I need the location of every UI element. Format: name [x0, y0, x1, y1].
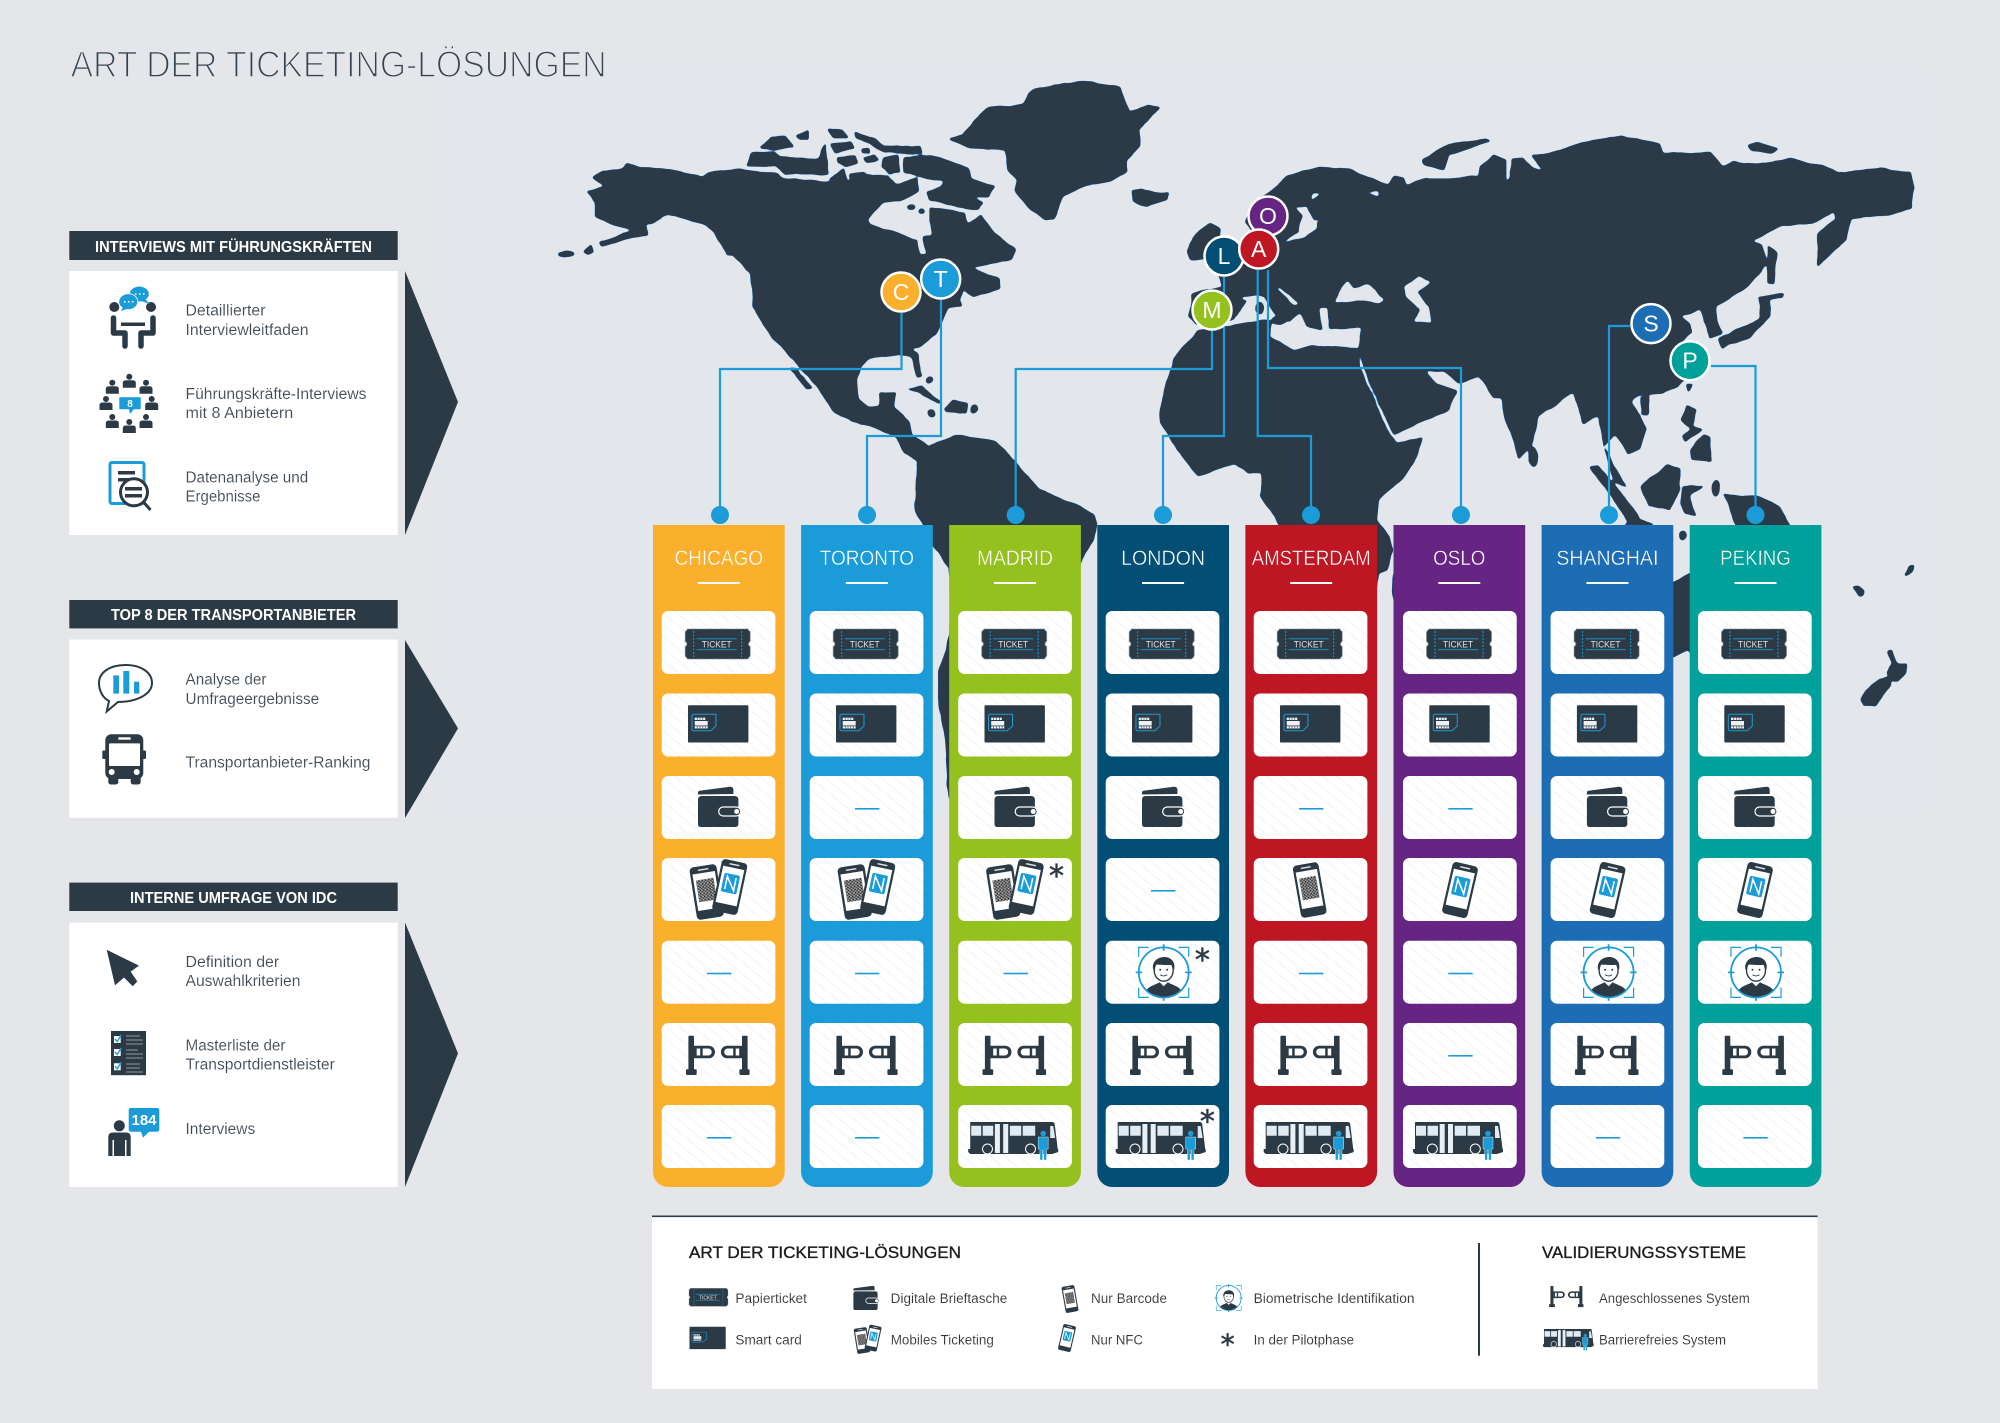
panel: top 8 header: TOP 8 DER TRANSPORTANBIETER [111, 607, 356, 624]
legend text: Smart card: Smart card [735, 1332, 802, 1348]
heading: Amsterdam: AMSTERDAM [1252, 546, 1371, 570]
card: wallet [1698, 776, 1812, 839]
legend text: In der Pilotphase: In der Pilotphase [1254, 1332, 1354, 1348]
card: none [1403, 776, 1517, 839]
card: ticket [1254, 611, 1367, 674]
card: smart card [1403, 694, 1517, 756]
icon: checklist [111, 1031, 146, 1075]
card: bus pilot [1106, 1104, 1219, 1168]
text: Definition der Auswahlkriterien: Auswahlkriterien [186, 973, 300, 990]
text: Analyse der Umfrageergebnisse: Analyse der [186, 672, 266, 688]
card: biometric [1698, 941, 1812, 1004]
card: smart card [1551, 694, 1664, 756]
card: none [1698, 1105, 1812, 1168]
panel: top 8 header [69, 600, 398, 628]
card: ticket [1551, 611, 1664, 674]
text: Definition der Auswahlkriterien [186, 954, 300, 990]
legend icon: pilot asterisk: * [1221, 1328, 1235, 1361]
panel: internal survey header: INTERNE UMFRAGE VON IDC [130, 890, 337, 907]
marker: Chicago [882, 272, 920, 312]
icon: meeting [109, 286, 156, 346]
legend text: Barrierefreies System: Barrierefreies System [1599, 1332, 1726, 1348]
card: biometric pilot [1106, 941, 1219, 1004]
text: Führungskräfte-Interviews: mit 8 Anbietern [186, 405, 293, 422]
heading: Toronto: TORONTO [820, 546, 914, 570]
world map [440, 65, 1930, 815]
legend icon: barcode phone [1061, 1285, 1079, 1313]
card: none [1106, 858, 1219, 921]
card: ticket [1698, 611, 1812, 674]
icon: eight people: 8 [127, 399, 133, 410]
marker: Madrid: M [1202, 297, 1222, 323]
text: Datenanalyse und Ergebnisse: Datenanalyse und [186, 470, 308, 487]
column: London [1097, 525, 1229, 1187]
legend icon: paper ticket: TICKET [699, 1295, 718, 1301]
card: gate [1254, 1023, 1367, 1086]
connector end dots [711, 506, 1764, 524]
text: Definition der Auswahlkriterien: Definition der [186, 954, 279, 971]
connector lines from cities to columns [720, 270, 1756, 515]
arrow: internal survey [405, 922, 458, 1187]
card: none [1254, 776, 1367, 839]
card: ticket: TICKET [1591, 640, 1621, 650]
card: bus pilot: * [1200, 1104, 1215, 1139]
column: Amsterdam [1245, 525, 1377, 1187]
marker: Chicago: C [893, 279, 909, 305]
card: smart card [1254, 694, 1367, 756]
card: gate [958, 1023, 1072, 1086]
heading: Oslo: OSLO [1433, 546, 1485, 570]
panel: interviews header: INTERVIEWS MIT FÜHRUNGSKRÄFTEN [95, 239, 372, 256]
icon: cursor [107, 950, 139, 986]
legend text: Biometrische Identifikation: Biometrische Identifikation [1254, 1291, 1415, 1306]
card: smart card [958, 694, 1072, 756]
legend icon: smart card [689, 1327, 726, 1349]
card: ticket [958, 611, 1072, 674]
text: Detaillierter Interviewleitfaden [186, 302, 308, 339]
legend text: Papierticket: Papierticket [735, 1291, 807, 1306]
card: none [810, 1105, 923, 1168]
text: Detaillierter Interviewleitfaden: Interviewleitfaden [186, 322, 308, 339]
card: none [1551, 1105, 1664, 1168]
card: ticket: TICKET [1443, 640, 1473, 650]
heading: Shanghai: SHANGHAI [1556, 546, 1658, 570]
card: ticket [1106, 611, 1219, 674]
card: gate [1106, 1023, 1219, 1086]
card: mobile pilot: * [1049, 859, 1064, 894]
card: biometric [1551, 941, 1664, 1004]
icon: person with 184 bubble: 184 [131, 1112, 157, 1129]
legend text: Mobiles Ticketing: Mobiles Ticketing [891, 1332, 994, 1348]
legend icon: NFC phone [1058, 1324, 1076, 1352]
text: Masterliste der Transportdienstleister: Transportdienstleister [186, 1056, 335, 1074]
card: mobile [810, 858, 923, 921]
marker: Shanghai: S [1643, 311, 1659, 337]
card: smart card [1106, 694, 1219, 756]
legend text: Digitale Brieftasche: Digitale Brieftasche [891, 1291, 1007, 1306]
card: wallet [662, 776, 775, 839]
legend icon: gate [1549, 1286, 1583, 1307]
card: ticket: TICKET [702, 640, 732, 650]
panel: interviews [69, 271, 398, 535]
card: none [1403, 1023, 1517, 1086]
heading: London: LONDON [1121, 546, 1205, 570]
legend heading: validation: VALIDIERUNGSSYSTEME [1542, 1244, 1746, 1262]
card: none [810, 941, 923, 1004]
card: none [1254, 941, 1367, 1004]
arrow: interviews [405, 271, 458, 535]
arrow: top 8 [405, 640, 458, 818]
text: Datenanalyse und Ergebnisse: Ergebnisse [186, 489, 260, 506]
panel: interviews header [69, 231, 398, 260]
card: NFC phone [1403, 858, 1517, 921]
legend icon: biometric [1215, 1284, 1243, 1312]
marker: Peking [1670, 341, 1710, 380]
card: gate [1698, 1023, 1812, 1086]
card: mobile [662, 858, 775, 921]
text: Datenanalyse und Ergebnisse [186, 470, 308, 506]
column: Shanghai [1542, 525, 1673, 1187]
icon: chat bubble chart [99, 665, 152, 712]
marker: Peking: P [1682, 348, 1698, 374]
legend text: Angeschlossenes System: Angeschlossenes System [1599, 1291, 1750, 1306]
marker: Toronto: T [934, 266, 948, 292]
text: Detaillierter Interviewleitfaden: Detaillierter [186, 302, 266, 320]
card: none [1403, 941, 1517, 1004]
text: Interviews: Interviews [186, 1121, 255, 1138]
text: Masterliste der Transportdienstleister [186, 1038, 335, 1074]
heading: Chicago: CHICAGO [674, 546, 763, 570]
text: Führungskräfte-Interviews: Führungskräfte-Interviews [186, 386, 367, 403]
card: barcode phone [1254, 858, 1367, 921]
marker: Shanghai [1632, 304, 1670, 343]
legend icon: mobile [854, 1324, 882, 1354]
icon: bus front [102, 734, 146, 784]
legend icon: bus [1543, 1329, 1594, 1350]
card: mobile pilot [958, 858, 1072, 921]
card: smart card [810, 694, 923, 756]
card: NFC phone [1551, 858, 1664, 921]
legend text: Nur Barcode: Nur Barcode [1091, 1291, 1167, 1306]
card: gate [1551, 1023, 1664, 1086]
text: Analyse der Umfrageergebnisse [186, 672, 319, 708]
text: Masterliste der Transportdienstleister: Masterliste der [186, 1038, 286, 1054]
panel: internal survey header [69, 883, 398, 911]
marker: London: L [1218, 243, 1231, 269]
icon: person with 184 bubble [108, 1108, 159, 1156]
card: ticket [1403, 611, 1517, 674]
card: bus [1254, 1105, 1367, 1168]
card: gate [810, 1023, 923, 1086]
card: wallet [1551, 776, 1664, 839]
panel: internal survey [69, 922, 398, 1187]
column: Peking [1690, 525, 1821, 1187]
icon: eight people [100, 374, 158, 433]
column: Oslo [1394, 525, 1525, 1187]
heading: Peking: PEKING [1720, 546, 1791, 570]
marker: Amsterdam: A [1251, 236, 1267, 262]
card: NFC phone [1698, 858, 1812, 921]
panel: top 8 [69, 640, 398, 818]
card: wallet [958, 776, 1072, 839]
legend icon: wallet [853, 1286, 879, 1310]
card: none [810, 776, 923, 839]
marker: Oslo: O [1259, 203, 1277, 229]
marker: London [1204, 236, 1244, 276]
text: Transportanbieter-Ranking: Transportanbieter-Ranking [186, 754, 370, 772]
card: ticket [662, 611, 775, 674]
card: ticket: TICKET [850, 640, 880, 650]
card: bus [1403, 1105, 1517, 1168]
card: ticket: TICKET [1146, 640, 1176, 650]
card: biometric pilot: * [1195, 943, 1210, 978]
card: none [662, 1105, 775, 1168]
card: ticket: TICKET [1738, 640, 1768, 650]
card: smart card [662, 694, 775, 756]
marker: Oslo [1248, 196, 1288, 236]
heading: Madrid: MADRID [977, 546, 1053, 570]
legend heading: ticketing: ART DER TICKETING-LÖSUNGEN [689, 1244, 961, 1262]
card: bus [958, 1105, 1072, 1168]
legend panel [652, 1216, 1818, 1389]
card: wallet [1106, 776, 1219, 839]
legend text: Nur NFC: Nur NFC [1091, 1332, 1143, 1348]
column: Toronto [801, 525, 933, 1187]
card: gate [662, 1023, 775, 1086]
icon: document analysis [110, 462, 150, 510]
marker: Toronto [921, 260, 960, 298]
title: ART DER TICKETING-LÖSUNGEN [71, 44, 607, 85]
card: ticket: TICKET [998, 640, 1029, 650]
card: ticket [810, 611, 923, 674]
map markers [882, 196, 1710, 380]
legend icon: paper ticket [689, 1288, 728, 1306]
text: Analyse der Umfrageergebnisse: Umfrageergebnisse [186, 691, 319, 708]
card: smart card [1698, 694, 1812, 756]
marker: Madrid [1192, 290, 1232, 330]
card: none [958, 941, 1072, 1004]
column: Madrid [949, 525, 1081, 1187]
column: Chicago [653, 525, 785, 1187]
card: none [662, 941, 775, 1004]
text: Führungskräfte-Interviews [186, 386, 367, 422]
card: ticket: TICKET [1294, 640, 1324, 650]
marker: Amsterdam [1239, 230, 1278, 268]
